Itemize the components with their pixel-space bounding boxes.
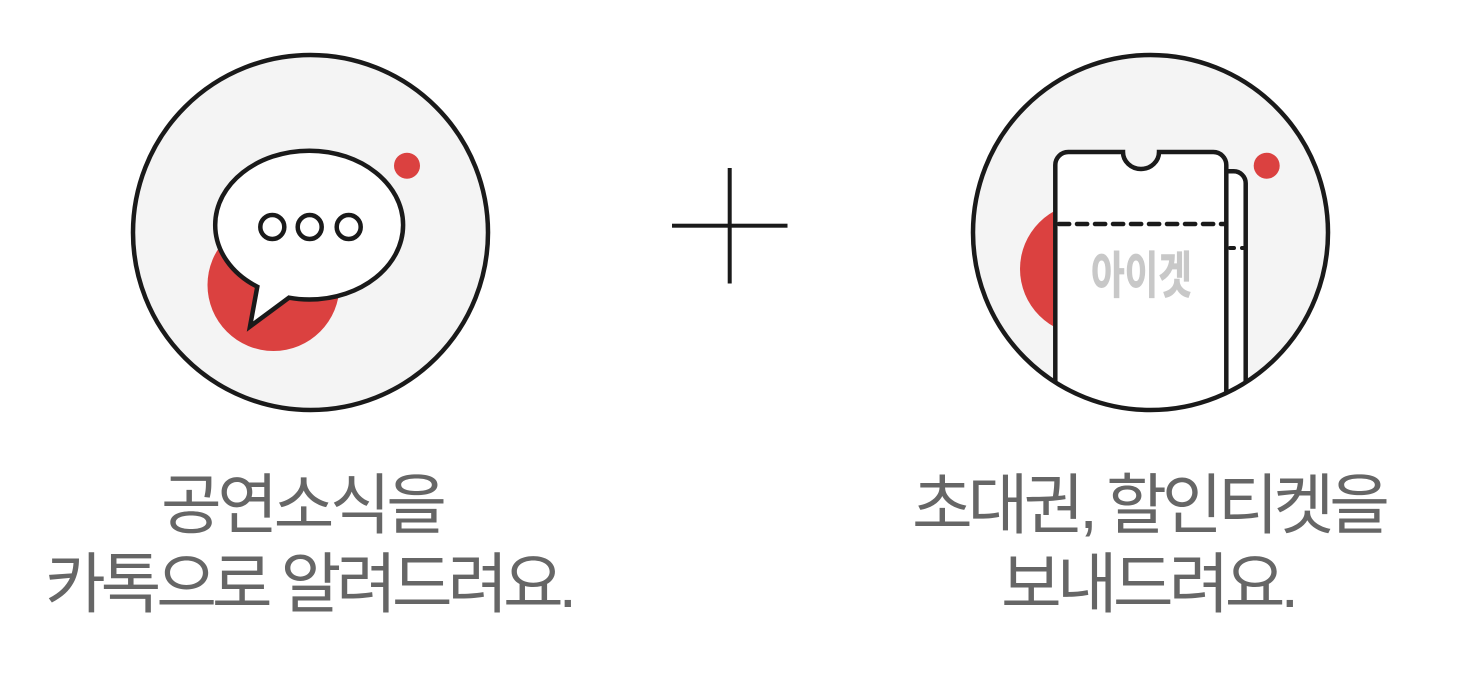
caption: left: 카톡으로 알려드려요. (45, 547, 577, 621)
caption: left (45, 468, 577, 621)
icon: tickets in circle (973, 55, 1328, 420)
ticket logo text: 아이겟 (1091, 248, 1192, 304)
icon: plus sign (672, 168, 788, 284)
icon: kakao talk speech bubble in circle (133, 55, 488, 410)
icon: small red dot (394, 153, 420, 179)
icon: large red circle (1020, 203, 1152, 335)
icon: speech bubble (215, 151, 403, 326)
icon: three dots (260, 215, 361, 239)
icon: small red dot (1254, 153, 1280, 179)
caption: left: 공연소식을 (161, 468, 447, 542)
icon: back ticket (1228, 169, 1248, 389)
caption: right: 보내드려요. (1001, 547, 1299, 621)
icon: front ticket (1055, 152, 1226, 420)
icon: large red circle (208, 219, 340, 351)
caption: right: 초대권, 할인티켓을 (912, 468, 1390, 542)
caption: right (912, 468, 1390, 621)
